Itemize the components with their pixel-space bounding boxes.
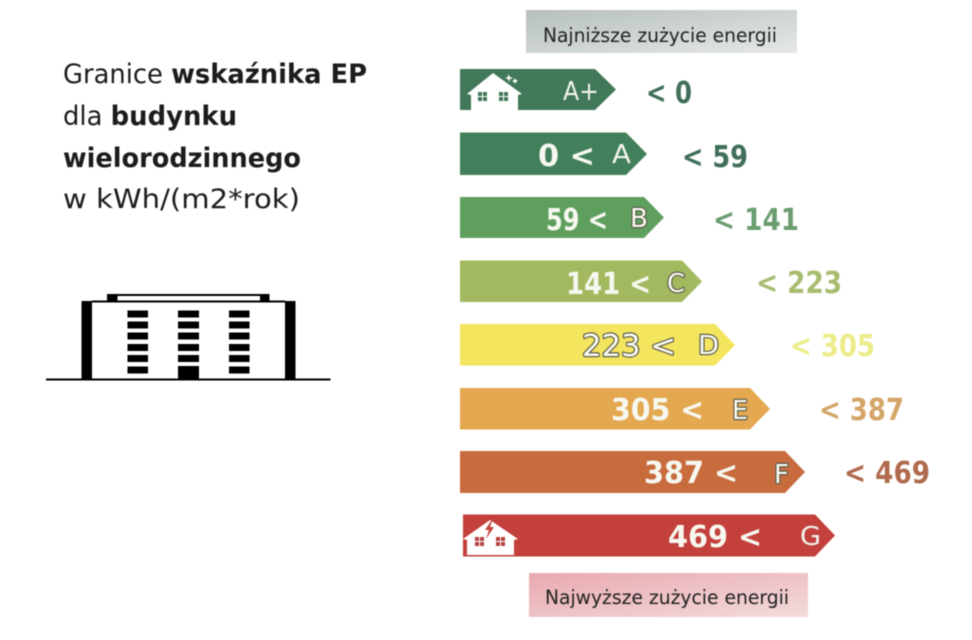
class E bar: E: [732, 396, 748, 426]
label: highest energy use: Najwyższe zużycie energii: [545, 586, 789, 609]
value: below 387: < 387: [819, 393, 904, 428]
title: dla budynku: [63, 101, 237, 132]
label: lowest energy use: Najniższe zużycie energii: [543, 24, 777, 47]
title: wielorodzinnego: [63, 143, 301, 174]
class B bar: [460, 197, 664, 238]
class F bar: 387 <: [644, 456, 738, 491]
class F bar: F: [774, 460, 789, 490]
value: below 0: < 0: [646, 76, 692, 111]
value: below 223: < 223: [756, 266, 842, 301]
class G bar: 469 <: [668, 520, 762, 555]
class E bar: [460, 388, 770, 430]
value: below 59: < 59: [682, 140, 748, 175]
title: Granice wskaźnika EP: [63, 59, 367, 90]
class A bar: 0 <: [538, 139, 595, 174]
class C bar: 141 <: [566, 267, 651, 302]
class A bar: A: [612, 140, 631, 170]
class A+ bar: [460, 69, 616, 110]
class G bar: [463, 514, 835, 556]
value: below 305: < 305: [790, 329, 875, 364]
class G bar: G: [800, 522, 821, 552]
class A bar: [460, 132, 647, 175]
icon: apartment building: [46, 294, 330, 380]
class F bar: [460, 451, 805, 493]
icon: house with lightning: [463, 518, 518, 555]
value: below 141: < 141: [713, 203, 799, 238]
class A+ bar: A+: [563, 77, 599, 107]
label: lowest energy use: [526, 10, 797, 53]
label: highest energy use: [529, 573, 808, 617]
title: w kWh/(m2*rok): [63, 184, 300, 215]
icon: house with sparkles: [467, 73, 522, 110]
class E bar: 305 <: [611, 393, 704, 428]
class D bar: [460, 324, 735, 366]
class C bar: [460, 260, 702, 302]
class C bar: C: [667, 269, 685, 299]
class D bar: D: [698, 331, 719, 361]
class B bar: 59 <: [546, 203, 608, 238]
value: below 469: < 469: [844, 456, 930, 491]
title: [63, 59, 367, 215]
class B bar: B: [630, 204, 648, 234]
class D bar: 223 <: [582, 329, 676, 364]
